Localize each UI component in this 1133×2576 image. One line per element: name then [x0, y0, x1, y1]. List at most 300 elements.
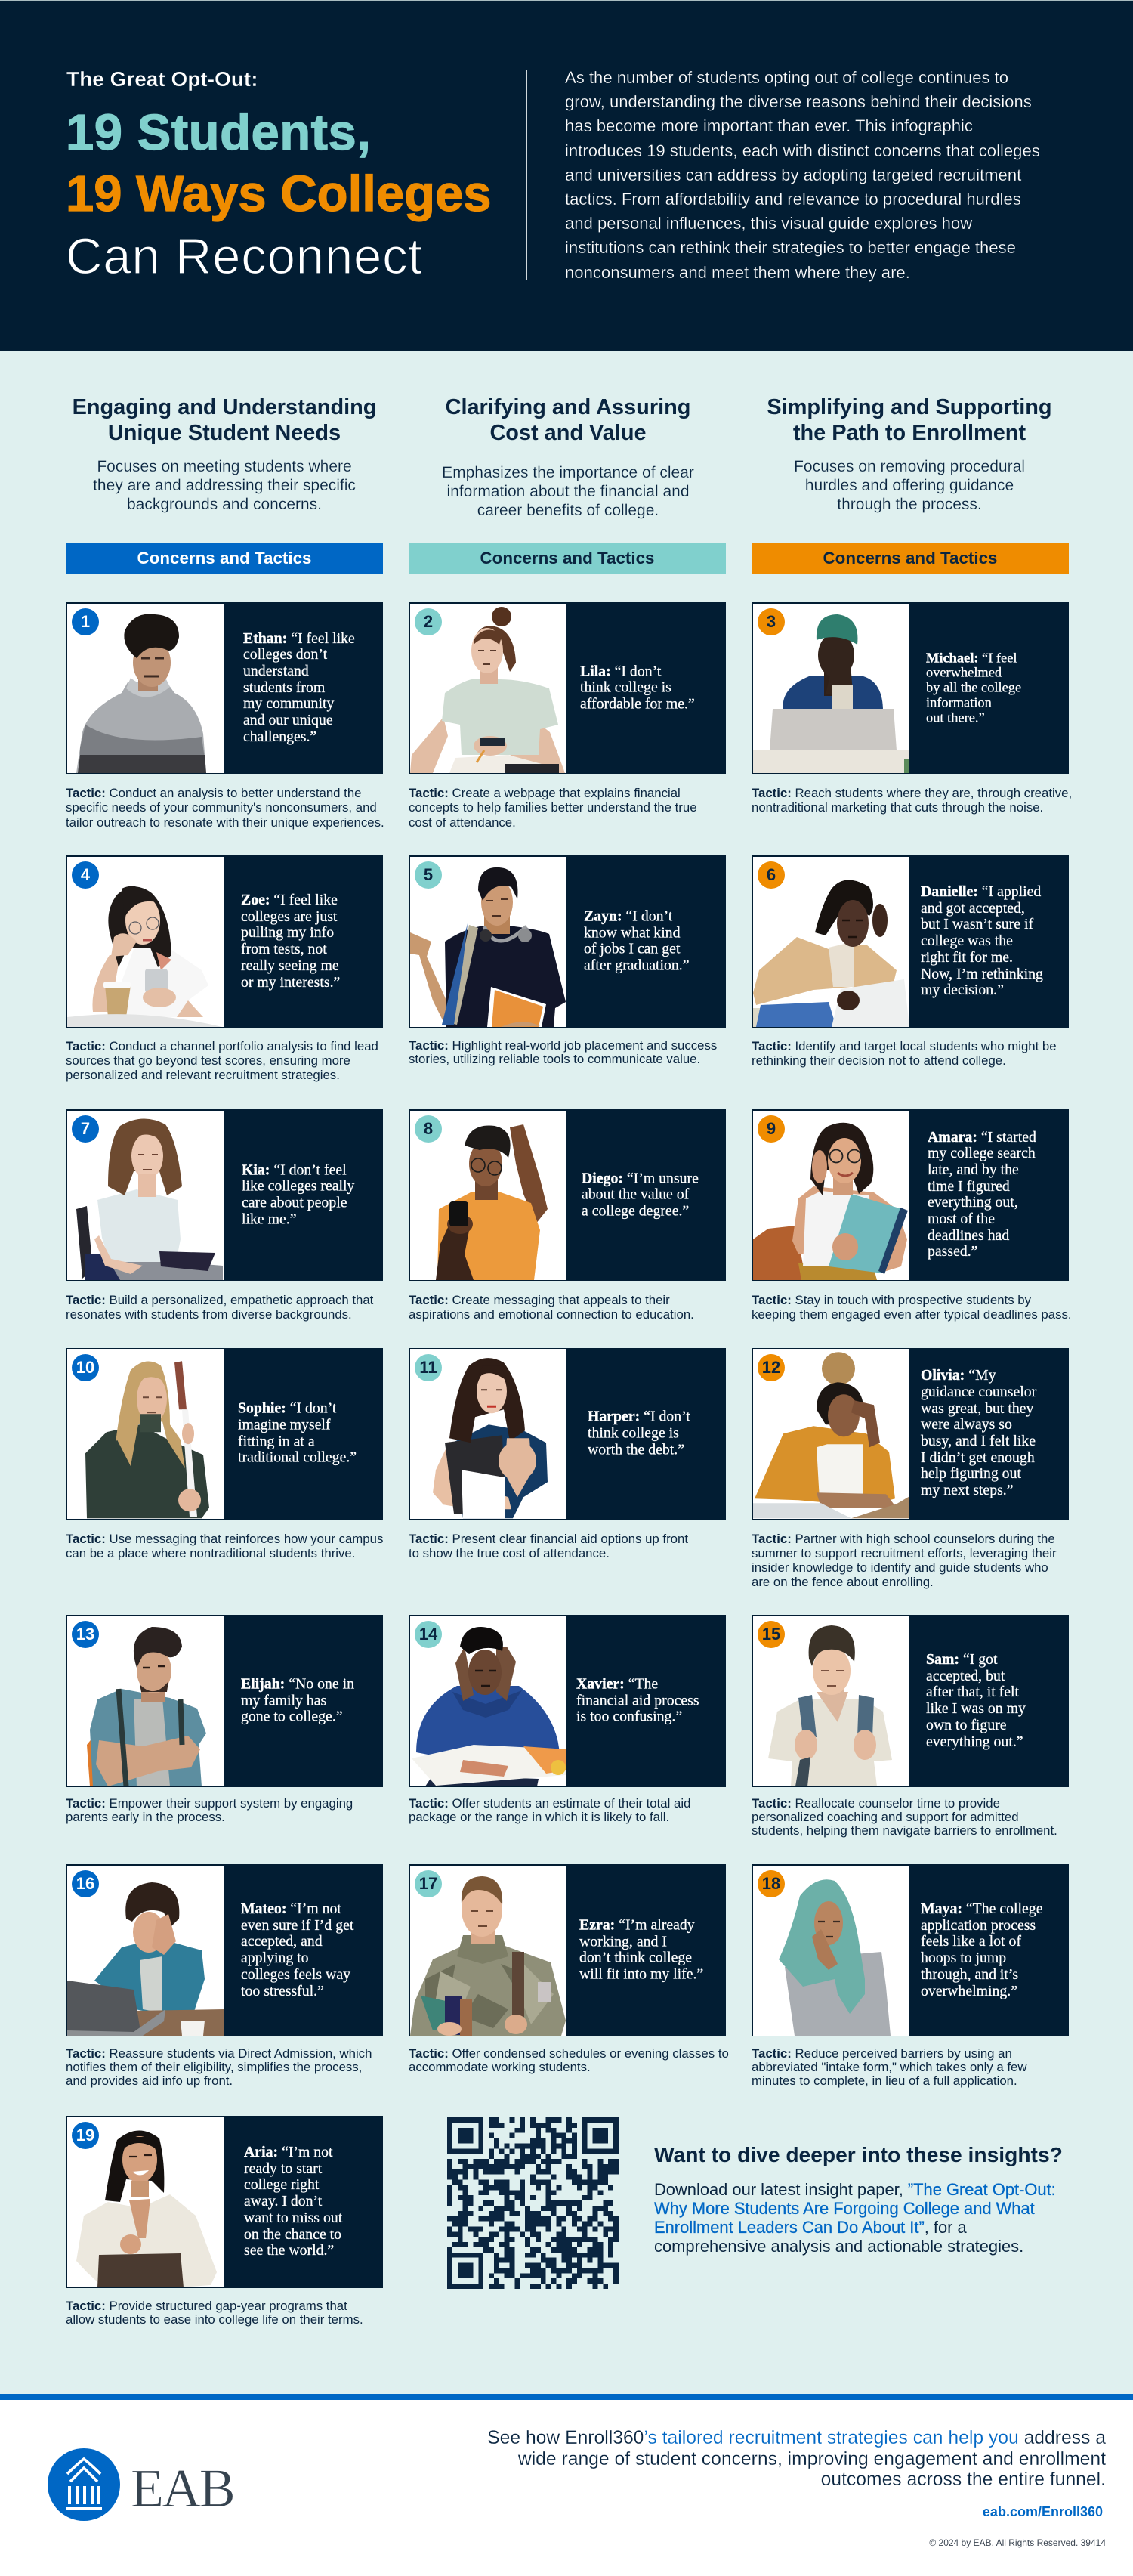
number badge: 19: [76, 2126, 94, 2145]
student 14 Xavier: [409, 1614, 726, 1616]
tactic: Tactic: Reassure students via Direct Admission, which: [66, 2046, 372, 2061]
portrait: [66, 1865, 224, 2036]
intro paragraph: tactics. From affordability and relevance to procedural hurdles: [565, 190, 1021, 209]
bar: concerns and tactics orange: [752, 543, 1069, 574]
quote: Olivia: “My: [921, 1367, 996, 1384]
number badge: [415, 1115, 442, 1143]
tactic: [752, 2047, 1027, 2088]
quote: were always so: [921, 1417, 1012, 1433]
tactic: Tactic: Stay in touch with prospective students by: [752, 1293, 1031, 1307]
portrait: [66, 857, 224, 1026]
tactic: and provides aid info up front.: [66, 2073, 233, 2088]
quote: through, and it’s: [921, 1966, 1018, 1983]
quote: from tests, not: [241, 941, 327, 957]
column description 1: Focuses on meeting students where: [97, 458, 352, 475]
student 15 Sam: [752, 1614, 1069, 1616]
column heading 2: [446, 395, 690, 445]
number badge: 3: [767, 612, 776, 631]
portrait: [752, 1111, 909, 1280]
quote: [921, 1368, 1036, 1499]
tactic: Tactic: Identify and target local students who might be: [752, 1039, 1057, 1053]
quote: care about people: [242, 1194, 347, 1211]
student 6 Danielle: [752, 855, 1069, 1068]
quote: I didn’t get enough: [921, 1449, 1035, 1466]
call to action text: Download our latest insight paper, ”The Great Opt-Out:: [654, 2180, 1056, 2199]
quote: [926, 1652, 1026, 1750]
student 11 Harper: [409, 1348, 726, 1560]
tactic: [409, 2047, 729, 2074]
tactic: rethinking their decision not to attend college.: [752, 1053, 1006, 1068]
number badge: 18: [762, 1874, 780, 1893]
quote: and got accepted,: [921, 900, 1025, 917]
intro paragraph: and personal influences, this visual guide explores how: [565, 214, 972, 233]
quote: want to miss out: [244, 2210, 342, 2226]
column description 1: [93, 458, 356, 513]
number badge: 17: [419, 1874, 437, 1893]
quote: [579, 1918, 703, 1983]
tactic: [66, 1293, 373, 1322]
quote: [921, 1901, 1042, 1999]
number badge: 7: [81, 1119, 90, 1138]
footer message: wide range of student concerns, improving engagement and enrollment: [518, 2448, 1106, 2469]
quote: colleges don’t: [243, 646, 327, 663]
quote: understand: [243, 663, 309, 679]
quote: busy, and I felt like: [921, 1433, 1036, 1449]
quote: my family has: [241, 1692, 326, 1709]
number badge: 16: [76, 1874, 94, 1893]
quote: Ezra: “I’m already: [579, 1917, 695, 1934]
bar: concerns and tactics blue: [66, 543, 383, 574]
tactic: allow students to ease into college life on their terms.: [66, 2312, 363, 2327]
portrait: [409, 603, 566, 772]
quote: deadlines had: [928, 1227, 1009, 1244]
column description 2: Emphasizes the importance of clear: [442, 464, 694, 481]
quote: students from: [243, 679, 325, 696]
bar: concerns and tactics blue: Concerns and Tactics: [137, 549, 312, 567]
number badge: 13: [76, 1625, 94, 1644]
QR code: [447, 2117, 619, 2289]
student 17 Ezra: [409, 1863, 726, 1865]
tactic: [66, 2047, 372, 2088]
quote: gone to college.”: [241, 1709, 343, 1725]
quote: on the chance to: [244, 2226, 341, 2243]
quote: [580, 663, 695, 712]
quote: affordable for me.”: [580, 695, 695, 712]
quote: after graduation.”: [584, 957, 689, 974]
vertical divider: [526, 70, 527, 280]
portrait: [752, 603, 909, 772]
quote: a college degree.”: [582, 1202, 689, 1219]
student 4 Zoe: [66, 855, 383, 1082]
number badge: 4: [81, 865, 90, 884]
number badge: 11: [419, 1357, 437, 1377]
bar: concerns and tactics teal: Concerns and Tactics: [480, 549, 655, 567]
tactic: Tactic: Present clear financial aid options up front: [409, 1531, 688, 1546]
tactic: tailor outreach to resonate with their unique experiences.: [66, 815, 384, 830]
tactic: resonates with students from diverse backgrounds.: [66, 1307, 352, 1322]
tactic: aspirations and emotional connection to education.: [409, 1307, 694, 1322]
portrait: [752, 1616, 909, 1786]
quote: college was the: [921, 932, 1013, 949]
quote: own to figure: [926, 1717, 1007, 1733]
number badge: [758, 1115, 785, 1143]
number badge: 5: [424, 865, 433, 884]
quote: [582, 1170, 699, 1220]
quote: see the world.”: [244, 2242, 334, 2259]
quote: Michael: “I feel: [926, 650, 1017, 665]
tactic: summer to support recruitment efforts, leveraging their: [752, 1546, 1057, 1560]
tactic: students, helping them navigate barriers to enrollment.: [752, 1823, 1057, 1838]
tactic: [752, 786, 1072, 815]
column heading 1: Engaging and Understanding: [73, 395, 376, 419]
tactic: concepts to help families better understand the true: [409, 800, 697, 815]
title line: 19 Ways Colleges: 19 Ways Colleges: [66, 165, 492, 222]
column heading 1: [73, 395, 376, 445]
call to action text: Why More Students Are Forgoing College and What: [654, 2199, 1035, 2218]
portrait: [66, 1349, 224, 1519]
tactic: abbreviated "intake form," which takes only a few: [752, 2060, 1027, 2074]
bar: concerns and tactics orange: Concerns and Tactics: [823, 549, 998, 567]
column heading 3: [767, 395, 1052, 445]
student 5 Zayn: [409, 855, 726, 1066]
quote: after that, it felt: [926, 1684, 1019, 1700]
tactic: Tactic: Offer students an estimate of their total aid: [409, 1796, 690, 1811]
quote: [241, 1901, 353, 1999]
number badge: [758, 861, 785, 889]
overline: The Great Opt-Out:: [66, 67, 258, 91]
portrait: [409, 1865, 566, 2036]
footer message: outcomes across the entire funnel.: [821, 2469, 1106, 2490]
logo mark: [48, 2448, 120, 2521]
student 19 Aria: [66, 2115, 383, 2117]
number badge: [415, 861, 442, 889]
quote: [241, 1676, 354, 1726]
column heading 3: the Path to Enrollment: [793, 421, 1026, 445]
footer message: See how Enroll360’s tailored recruitment strategies can help you address a: [487, 2428, 1106, 2448]
number badge: 14: [419, 1625, 437, 1644]
quote: Elijah: “No one in: [241, 1675, 354, 1692]
quote: accepted, and: [241, 1933, 323, 1950]
tactic: [409, 1293, 694, 1322]
quote: away. I don’t: [244, 2193, 322, 2210]
quote: [926, 650, 1021, 725]
number badge: [758, 1354, 785, 1381]
quote: working, and I: [579, 1933, 667, 1950]
tactic: insider knowledge to identify and guide students who: [752, 1560, 1048, 1575]
tactic: Tactic: Create messaging that appeals to their: [409, 1293, 670, 1307]
tactic: personalized and relevant recruitment strategies.: [66, 1068, 340, 1082]
EAB logo: [47, 2447, 243, 2522]
quote: really seeing me: [241, 957, 339, 974]
quote: overwhelming.”: [921, 1982, 1017, 1999]
column description 3: Focuses on removing procedural: [794, 458, 1025, 475]
quote: but I wasn’t sure if: [921, 916, 1033, 932]
number badge: [72, 1870, 99, 1897]
tactic: [409, 1797, 690, 1824]
quote: of jobs I can get: [584, 941, 680, 957]
quote: like colleges really: [242, 1178, 354, 1195]
intro paragraph: introduces 19 students, each with distinct concerns that colleges: [565, 141, 1040, 160]
tactic: Tactic: Reduce perceived barriers by using an: [752, 2046, 1012, 2061]
portrait: [409, 857, 566, 1026]
tactic: nontraditional marketing that cuts through the noise.: [752, 800, 1043, 815]
quote: Diego: “I’m unsure: [582, 1170, 699, 1186]
column description 1: backgrounds and concerns.: [127, 496, 322, 513]
quote: was great, but they: [921, 1400, 1033, 1417]
number badge: 10: [76, 1357, 94, 1377]
quote: colleges feels way: [241, 1966, 350, 1983]
column description 2: information about the financial and: [446, 483, 690, 500]
tactic: parents early in the process.: [66, 1810, 225, 1824]
quote: don’t think college: [579, 1950, 692, 1966]
quote: by all the college: [926, 680, 1021, 695]
quote: pulling my info: [241, 924, 334, 941]
column description 3: [794, 458, 1025, 513]
tactic: cost of attendance.: [409, 815, 516, 830]
tactic: [66, 1797, 353, 1824]
student 18 Maya: [752, 1863, 1069, 1865]
number badge: [72, 1354, 99, 1381]
tactic: [752, 1039, 1057, 1068]
student 3 Michael: [752, 602, 1072, 815]
tactic: notifies them of their eligibility, simplifies the process,: [66, 2060, 362, 2074]
tactic: Tactic: Empower their support system by engaging: [66, 1796, 353, 1811]
tactic: [752, 1293, 1072, 1322]
quote: my community: [243, 695, 334, 712]
quote: Ethan: “I feel like: [243, 630, 355, 647]
quote: Zoe: “I feel like: [241, 892, 338, 908]
portrait: [409, 1111, 566, 1280]
quote: ready to start: [244, 2160, 322, 2177]
logo wordmark: EAB: [131, 2458, 233, 2519]
quote: overwhelmed: [926, 665, 1002, 680]
column heading 2: Cost and Value: [489, 421, 647, 445]
tactic: [752, 1531, 1057, 1589]
call to action text: Enrollment Leaders Can Do About It”, for a: [654, 2218, 967, 2237]
call to action text: [654, 2180, 1056, 2256]
tactic: keeping them engaged even after typical deadlines pass.: [752, 1307, 1072, 1322]
intro paragraph: has become more important than ever. This infographic: [565, 116, 973, 135]
tactic: Tactic: Offer condensed schedules or evening classes to: [409, 2046, 729, 2061]
number badge: [415, 1870, 442, 1897]
tactic: Tactic: Partner with high school counselors during the: [752, 1531, 1055, 1546]
number badge: 12: [762, 1357, 780, 1377]
quote: Harper: “I don’t: [588, 1409, 690, 1425]
quote: accepted, but: [926, 1668, 1005, 1684]
quote: everything out,: [928, 1194, 1018, 1211]
student 8 Diego: [409, 1109, 726, 1322]
number badge: [72, 2122, 99, 2149]
quote: time I figured: [928, 1178, 1010, 1195]
student 1 Ethan: [66, 602, 384, 830]
student 12 Olivia: [752, 1347, 1069, 1348]
portrait: [66, 2117, 224, 2287]
quote: [243, 630, 355, 745]
quote: even sure if I’d get: [241, 1917, 353, 1934]
portrait: [66, 1616, 224, 1786]
quote: out there.”: [926, 710, 985, 725]
number badge: 9: [767, 1119, 776, 1138]
number badge: 6: [767, 865, 776, 884]
quote: everything out.”: [926, 1733, 1023, 1749]
student 13 Elijah: [66, 1614, 383, 1616]
bar: concerns and tactics teal: [409, 543, 726, 574]
quote: Amara: “I started: [928, 1129, 1036, 1146]
quote: or my interests.”: [241, 973, 340, 990]
call to action heading: Want to dive deeper into these insights?: [654, 2142, 1063, 2166]
portrait: [752, 857, 909, 1026]
quote: Zayn: “I don’t: [584, 908, 672, 925]
quote: challenges.”: [243, 728, 316, 745]
number badge: 15: [762, 1625, 780, 1644]
tactic: personalized coaching and support for admitted: [752, 1810, 1019, 1824]
tactic: Tactic: Reallocate counselor time to provide: [752, 1796, 1000, 1811]
student 2 Lila: [409, 602, 726, 830]
tactic: [66, 1039, 378, 1082]
quote: think college is: [580, 679, 671, 696]
portrait: [66, 603, 224, 772]
quote: traditional college.”: [238, 1449, 357, 1466]
quote: [576, 1676, 699, 1726]
header band: [0, 0, 1133, 351]
intro paragraph: nonconsumers and meet them where they are.: [565, 263, 910, 282]
column heading 3: Simplifying and Supporting: [767, 395, 1052, 419]
portrait: [752, 1865, 909, 2036]
tactic: Tactic: Conduct an analysis to better understand the: [66, 786, 361, 800]
footer link: eab.com/Enroll360: [983, 2504, 1103, 2519]
quote: passed.”: [928, 1244, 977, 1260]
quote: feels like a lot of: [921, 1933, 1021, 1950]
number badge: [72, 1115, 99, 1143]
tactic: Tactic: Provide structured gap-year programs that: [66, 2299, 347, 2313]
quote: colleges are just: [241, 908, 337, 925]
intro paragraph: As the number of students opting out of college continues to: [565, 68, 1008, 87]
quote: [238, 1400, 357, 1466]
tactic: specific needs of your community's nonconsumers, and: [66, 800, 377, 815]
quote: about the value of: [582, 1186, 689, 1203]
column description 3: through the process.: [837, 496, 982, 513]
quote: guidance counselor: [921, 1384, 1036, 1400]
quote: college right: [244, 2176, 319, 2193]
quote: [920, 883, 1043, 998]
intro paragraph: grow, understanding the diverse reasons behind their decisions: [565, 92, 1032, 111]
quote: will fit into my life.”: [579, 1966, 703, 1983]
tactic: Tactic: Reach students where they are, through creative,: [752, 786, 1072, 800]
quote: [241, 892, 340, 991]
title line: 19 Students: 19 Students,: [66, 104, 371, 161]
call to action text: comprehensive analysis and actionable strategies.: [654, 2237, 1023, 2256]
tactic: sources that go beyond test scores, ensuring more: [66, 1053, 350, 1068]
tactic: Tactic: Create a webpage that explains financial: [409, 786, 681, 800]
intro paragraph: and universities can address by adopting targeted recruitment: [565, 165, 1021, 184]
tactic: [409, 1531, 688, 1560]
tactic: [66, 1531, 383, 1560]
tactic: to show the true cost of attendance.: [409, 1546, 610, 1560]
quote: my next steps.”: [921, 1482, 1014, 1498]
tactic: Tactic: Highlight real-world job placement and success: [409, 1038, 717, 1053]
number badge: 1: [81, 612, 90, 631]
quote: think college is: [588, 1424, 679, 1441]
quote: Sam: “I got: [926, 1651, 998, 1668]
quote: my college search: [928, 1145, 1036, 1161]
student 10 Sophie: [66, 1348, 383, 1560]
quote: Maya: “The college: [921, 1900, 1042, 1917]
tactic: Tactic: Use messaging that reinforces how your campus: [66, 1531, 383, 1546]
tactic: Tactic: Conduct a channel portfolio analysis to find lead: [66, 1039, 378, 1053]
tactic: [409, 786, 697, 830]
intro paragraph: [565, 68, 1040, 282]
number badge: [72, 608, 99, 635]
quote: fitting in at a: [238, 1433, 315, 1449]
column description 1: they are and addressing their specific: [93, 477, 356, 494]
student 9 Amara: [752, 1109, 1072, 1322]
portrait: [409, 1616, 566, 1786]
column heading 1: Unique Student Needs: [108, 421, 341, 445]
copyright: © 2024 by EAB. All Rights Reserved. 39414: [929, 2537, 1106, 2548]
footer: [0, 2394, 1133, 2576]
quote: late, and by the: [928, 1161, 1019, 1178]
quote: Kia: “I don’t feel: [242, 1161, 347, 1178]
quote: [588, 1409, 690, 1458]
tactic: minutes to complete, in lieu of a full application.: [752, 2073, 1017, 2088]
portrait: [409, 1349, 566, 1519]
number badge: [758, 608, 785, 635]
number badge: 8: [424, 1119, 433, 1138]
number badge: 2: [424, 612, 433, 631]
number badge: [758, 1870, 785, 1897]
quote: worth the debt.”: [588, 1441, 684, 1458]
quote: Mateo: “I’m not: [241, 1900, 341, 1917]
intro paragraph: institutions can rethink their strategies to better engage these: [565, 238, 1016, 257]
quote: applying to: [241, 1950, 309, 1966]
quote: financial aid process: [576, 1692, 699, 1709]
quote: [244, 2145, 342, 2259]
quote: Now, I’m rethinking: [921, 966, 1043, 982]
quote: Lila: “I don’t: [580, 663, 661, 679]
quote: Sophie: “I don’t: [238, 1400, 336, 1417]
number badge: [72, 861, 99, 889]
quote: right fit for me.: [921, 949, 1013, 966]
footer message: [487, 2428, 1106, 2491]
column description 3: hurdles and offering guidance: [805, 477, 1014, 494]
quote: like me.”: [242, 1211, 296, 1227]
tactic: [66, 2299, 363, 2327]
tactic: [752, 1797, 1057, 1838]
column description 2: [442, 464, 694, 519]
tactic: [409, 1038, 717, 1066]
quote: information: [926, 694, 992, 710]
quote: Danielle: “I applied: [921, 883, 1041, 900]
number badge: [415, 608, 442, 635]
tactic: accommodate working students.: [409, 2060, 591, 2074]
column description 2: career benefits of college.: [477, 502, 659, 519]
quote: [928, 1129, 1036, 1260]
quote: hoops to jump: [921, 1950, 1006, 1966]
tactic: Tactic: Build a personalized, empathetic approach that: [66, 1293, 373, 1307]
quote: my decision.”: [921, 982, 1004, 998]
quote: [242, 1161, 355, 1227]
quote: most of the: [928, 1211, 995, 1227]
number badge: [758, 1621, 785, 1648]
tactic: package or the range in which it is likely to fall.: [409, 1810, 669, 1824]
quote: too stressful.”: [241, 1982, 324, 1999]
student 16 Mateo: [66, 1863, 383, 1865]
number badge: [72, 1621, 99, 1648]
tactic: are on the fence about enrolling.: [752, 1575, 934, 1589]
quote: imagine myself: [238, 1417, 331, 1433]
number badge: [415, 1354, 442, 1381]
quote: Xavier: “The: [576, 1675, 658, 1692]
